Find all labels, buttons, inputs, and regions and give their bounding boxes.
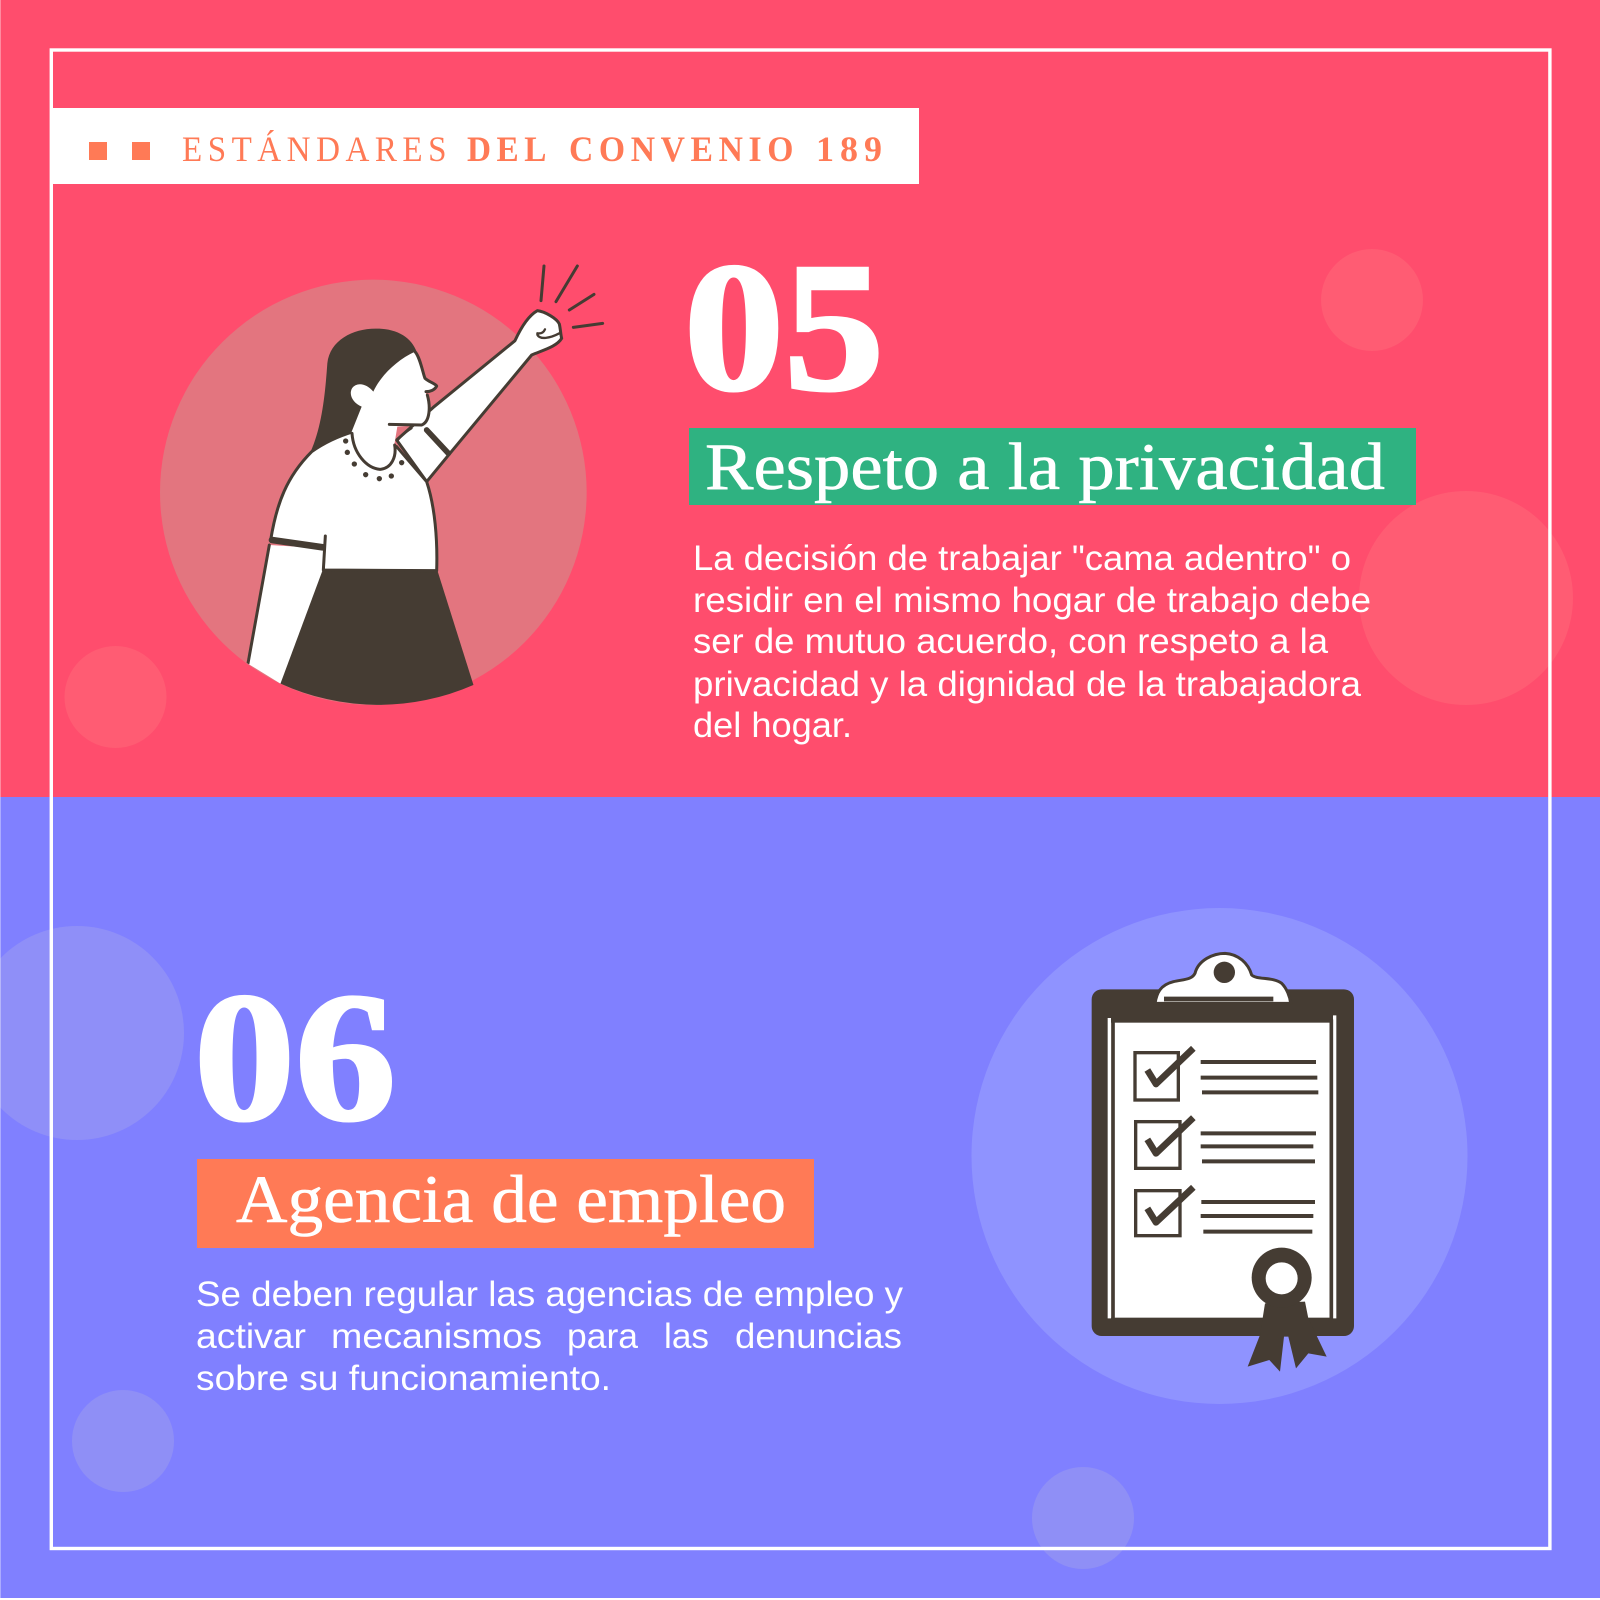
body text 06: mecanismos: [331, 1316, 542, 1356]
body text 05: La decisión de trabajar "cama adentro" o: [693, 538, 1351, 578]
decorative circle bottom: [1032, 1467, 1134, 1569]
header square 1: [89, 142, 107, 160]
lower arm: [247, 545, 324, 687]
body text 06: denuncias: [735, 1316, 902, 1356]
header bar: [51, 108, 919, 184]
necklace: [343, 438, 404, 481]
checklist: [1135, 1048, 1318, 1236]
panel: blue background: [0, 797, 1600, 1598]
number 05: 05: [684, 225, 884, 429]
header square 2: [132, 142, 150, 160]
clip: [1155, 953, 1291, 1003]
burst lines: [541, 266, 603, 327]
body text 05: ser de mutuo acuerdo, con respeto a la: [693, 621, 1328, 661]
face and neck: [350, 352, 435, 448]
body text 06: para: [567, 1316, 638, 1356]
decorative circle left: [64, 646, 166, 748]
hair: [311, 329, 417, 452]
heading: Agencia de empleo: Agencia de empleo: [236, 1161, 786, 1237]
number 06: 06: [194, 955, 396, 1159]
header title: [182, 129, 888, 169]
section 06 illustration: clipboard: [972, 908, 1468, 1404]
decorative circle lower left: [72, 1390, 174, 1492]
header title: ESTÁNDARES: [182, 129, 452, 169]
section 05 illustration: woman with raised fist: [160, 266, 603, 717]
body text 06: sobre su funcionamiento.: [196, 1358, 611, 1398]
ribbon seal: [1248, 1302, 1327, 1372]
body text 05: [693, 538, 1371, 745]
raised arm: [397, 311, 562, 482]
body text 06: Se deben regular las agencias de empleo y: [196, 1274, 903, 1314]
body text 06: activar: [196, 1316, 306, 1356]
body text 05: del hogar.: [693, 705, 852, 745]
header title: DEL: [467, 129, 552, 169]
decorative circle right: [1359, 491, 1573, 705]
decorative circle top right: [1321, 249, 1423, 351]
body text 05: residir en el mismo hogar de trabajo debe: [693, 580, 1371, 620]
skirt: [280, 571, 474, 705]
header title: 189: [816, 129, 888, 169]
header title: CONVENIO: [569, 129, 799, 169]
body text 06: [196, 1274, 903, 1398]
panel: red background: [0, 0, 1600, 797]
decorative circle upper left: [0, 926, 184, 1140]
clipboard board: [1092, 989, 1354, 1336]
blouse: [271, 432, 437, 571]
heading: Respeto a la privacidad: Respeto a la privacidad: [705, 430, 1385, 504]
body text 05: privacidad y la dignidad de la trabajadora: [693, 664, 1361, 704]
body text 06: las: [664, 1316, 709, 1356]
